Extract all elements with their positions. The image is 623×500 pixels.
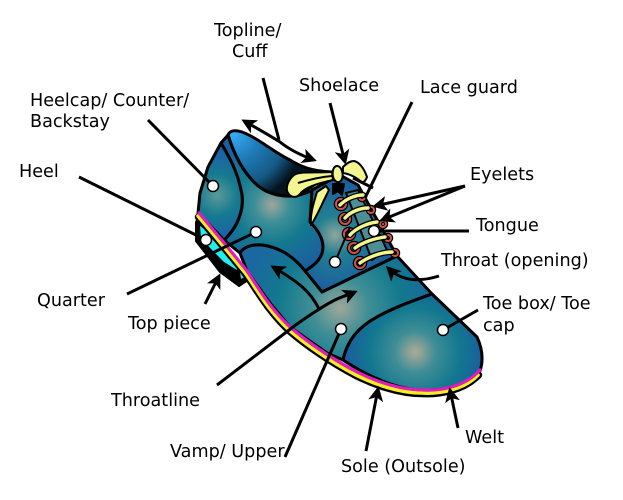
heel block — [196, 222, 251, 286]
vamp — [240, 245, 432, 360]
lace area — [305, 175, 397, 292]
leader: sole — [366, 389, 378, 451]
leader: topline — [244, 78, 314, 160]
label: Welt: Welt — [465, 428, 504, 448]
marker dots — [200, 180, 448, 336]
leader: top piece — [205, 276, 219, 304]
collar interior — [228, 131, 332, 196]
label: Vamp/ Upper: Vamp/ Upper — [170, 442, 285, 462]
label: Heel: Heel — [19, 162, 59, 182]
label: Heelcap/ Counter/ Backstay — [30, 91, 189, 132]
label: Toe box/ Toe cap — [482, 294, 591, 336]
label: Shoelace: Shoelace — [299, 76, 379, 96]
label: Sole (Outsole): Sole (Outsole) — [341, 457, 466, 477]
label: Topline/ Cuff: Cuff — [232, 42, 268, 62]
leader lines — [79, 78, 478, 457]
label: Throatline: Throatline — [110, 391, 200, 411]
label: Toe box/ Toe cap: cap — [483, 316, 515, 336]
label: Tongue: Tongue — [475, 216, 539, 236]
leader: lace area — [335, 227, 350, 262]
label: Heelcap/ Counter/ Backstay: Heelcap/ Counter/ — [30, 91, 189, 111]
label: Topline/ Cuff: Topline/ — [213, 21, 281, 41]
leader: throatline — [217, 267, 355, 385]
label: Quarter: Quarter — [37, 291, 106, 311]
shoe upper — [197, 131, 482, 390]
shoelace bow — [287, 161, 373, 225]
label: Topline/ Cuff — [213, 21, 281, 62]
label: Toe box/ Toe cap: Toe box/ Toe — [482, 294, 591, 314]
toe cap — [343, 294, 482, 390]
leader: shoelace — [330, 103, 345, 162]
sole and welt — [198, 213, 480, 394]
label: Eyelets: Eyelets — [470, 165, 534, 185]
label: Throat (opening): Throat (opening) — [440, 251, 589, 271]
leader: vamp — [285, 329, 341, 457]
leader: eyelets — [375, 186, 465, 220]
label: Top piece: Top piece — [127, 314, 211, 334]
leader: throat — [388, 268, 439, 280]
heel cap — [197, 143, 242, 240]
tongue — [346, 190, 387, 260]
leader: heelcap — [148, 120, 213, 186]
leader: toe box — [443, 310, 478, 330]
quarter — [221, 135, 323, 271]
leader: tongue — [373, 230, 469, 232]
leader: welt — [450, 390, 458, 428]
leader: heel — [79, 177, 206, 240]
leader: lace guard — [365, 102, 412, 198]
eyelets — [336, 194, 398, 268]
label: Heelcap/ Counter/ Backstay: Backstay — [30, 112, 110, 132]
leader: quarter — [127, 232, 256, 294]
laces — [340, 195, 392, 263]
label: Lace guard: Lace guard — [420, 78, 518, 98]
